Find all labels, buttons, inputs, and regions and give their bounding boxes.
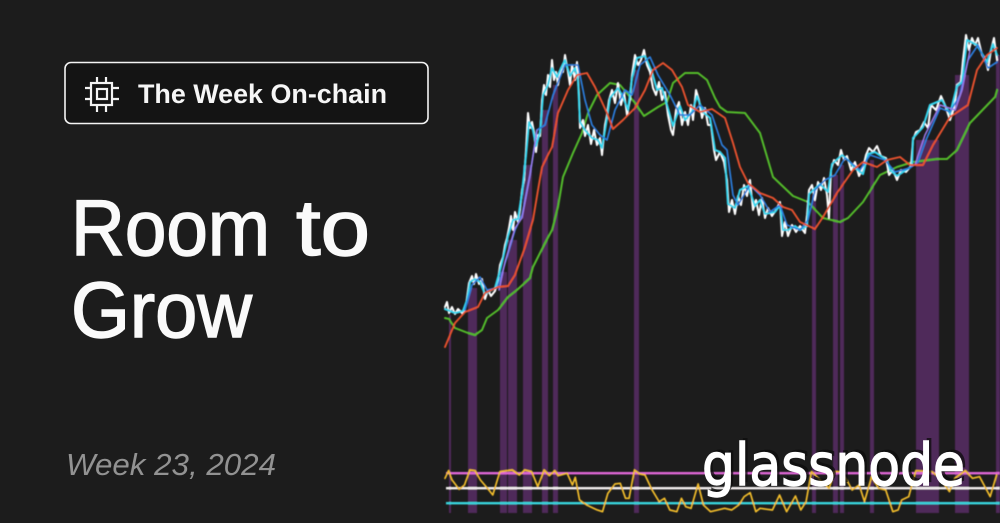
date: Week 23, 2024	[66, 447, 276, 482]
oscillator threshold lines	[446, 472, 1000, 504]
yellow oscillator	[445, 470, 997, 512]
white price line	[445, 35, 997, 314]
title: Grow	[71, 265, 253, 354]
badge: The Week On-chain	[65, 62, 428, 124]
highlighted periods	[449, 55, 1000, 513]
purple moving average segments	[499, 130, 537, 290]
title: Room	[71, 183, 270, 272]
red medium moving average	[445, 48, 997, 347]
title: to	[296, 183, 370, 272]
logo: glassnode: glassnode	[702, 431, 965, 499]
chart: price with moving averages and oscillator	[445, 35, 1000, 513]
green long moving average	[445, 73, 997, 335]
icon: microchip	[85, 77, 119, 112]
badge label: The Week On-chain	[138, 79, 387, 109]
cyan price overlay	[445, 40, 997, 313]
logo: glassnode: glassnode	[705, 428, 968, 496]
title	[71, 183, 370, 354]
blue short moving average	[465, 45, 997, 310]
